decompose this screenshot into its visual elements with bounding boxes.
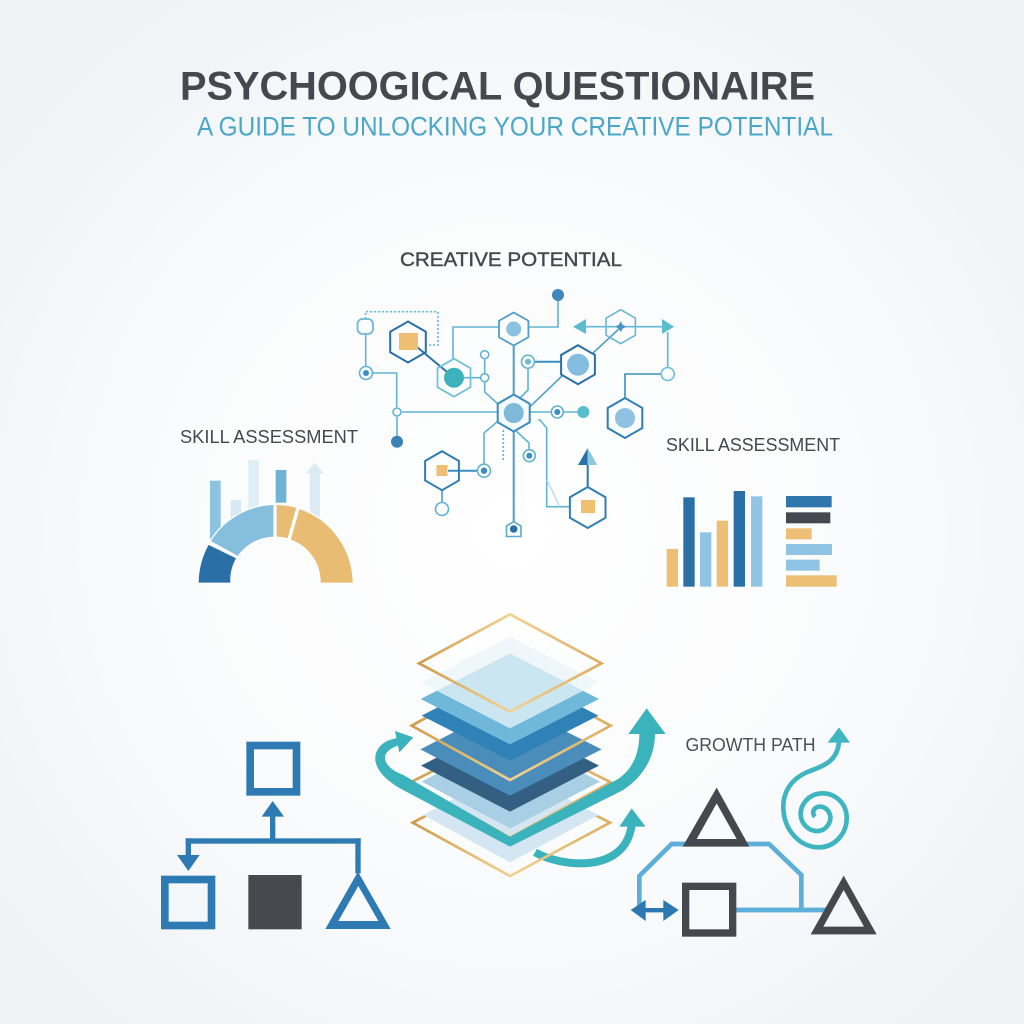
path outline (639, 844, 827, 910)
lower triangle (811, 876, 877, 934)
spiral arrow (783, 727, 850, 847)
heading: growth path: GROWTH PATH (686, 735, 816, 755)
bar charts (667, 491, 837, 587)
arrowheads: horizontal teal (573, 319, 674, 334)
hexagon node: orange square (390, 322, 426, 362)
vertical bars (667, 491, 762, 587)
growth path diagram (631, 727, 877, 934)
gauge segments (198, 504, 353, 583)
heading: skill assessment right: SKILL ASSESSMENT (666, 435, 840, 455)
hexagon node: top centre (499, 312, 528, 346)
network connector lines (366, 295, 668, 522)
small circle nodes (360, 351, 674, 516)
double arrow (631, 900, 679, 921)
bottom terminal node (506, 522, 521, 536)
node: rounded square (358, 319, 373, 334)
network diagram (358, 289, 674, 536)
title: PSYCHOOGICAL QUESTIONAIRE (180, 64, 815, 108)
hexagon node: top right star (606, 310, 635, 344)
connector lines and arrows (177, 801, 361, 873)
hexagon node: lower left (425, 451, 459, 490)
dark square (686, 886, 733, 933)
filled dots (363, 289, 589, 474)
bottom left square (165, 879, 211, 925)
hexagon node: central hub (498, 394, 530, 432)
lower teal arrow (535, 808, 646, 863)
heading: skill assessment left: SKILL ASSESSMENT (180, 427, 358, 447)
top square (250, 745, 296, 792)
triangle (325, 872, 391, 929)
subtitle: A GUIDE TO UNLOCKING YOUR CREATIVE POTENTIAL (197, 112, 833, 142)
top gold outline (419, 614, 602, 712)
heading: creative potential: CREATIVE POTENTIAL (400, 250, 622, 271)
filled dark square (248, 875, 302, 929)
stack layers (411, 637, 611, 876)
arrowhead: up triangle (578, 448, 597, 465)
gauge chart with bars (198, 460, 353, 583)
wrap-around teal arrow (375, 708, 666, 847)
background bars (210, 460, 323, 539)
hexagon node: teal circle (438, 359, 470, 397)
horizontal bars (786, 496, 837, 587)
hexagon node: lower right (570, 487, 606, 528)
hexagon node: right lower (608, 398, 642, 438)
layered stack with arrows (375, 614, 666, 876)
upper triangle (683, 788, 749, 847)
hierarchy diagram (165, 745, 391, 929)
hexagon node: right upper (561, 345, 595, 384)
